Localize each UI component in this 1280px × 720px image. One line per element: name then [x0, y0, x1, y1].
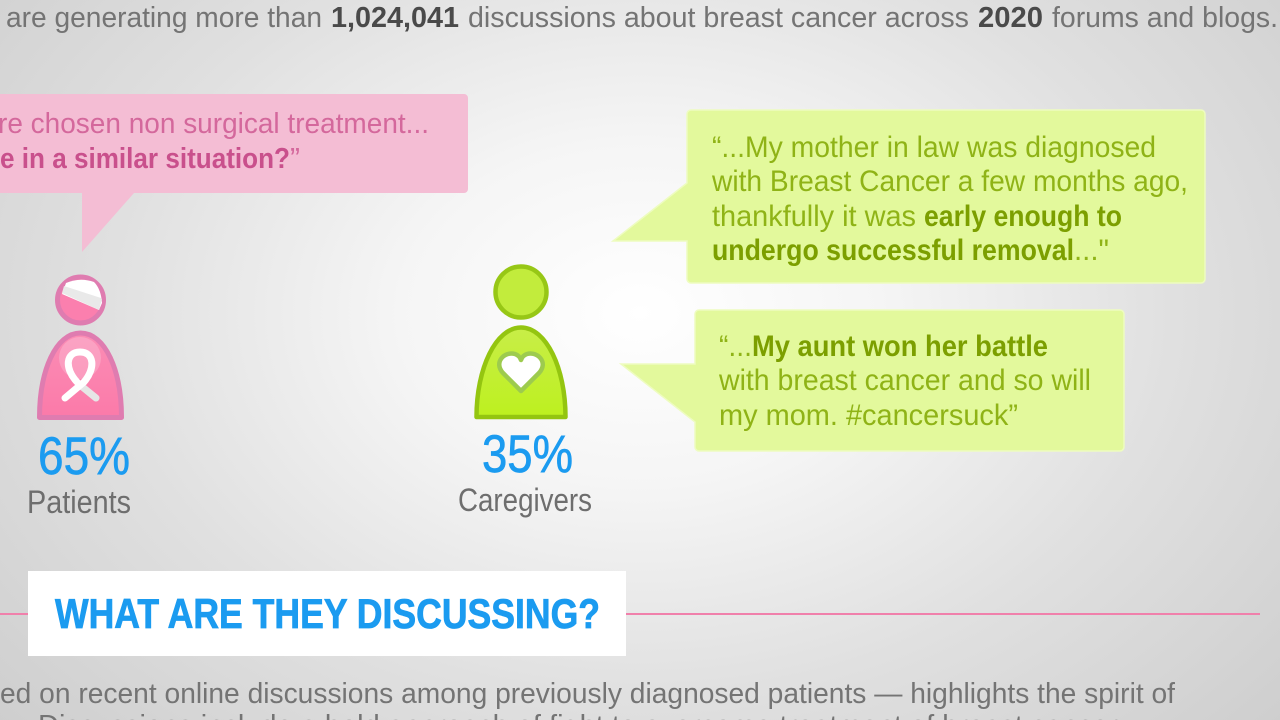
callout: caregiver quote 1: undergo successful removal — [712, 234, 1074, 267]
callout: patient quote: re chosen non surgical treatment... — [0, 108, 429, 140]
text block: discussion summary: ed on recent online discussions among previously diagnosed patients — highlights the spirit of — [0, 678, 1176, 710]
callout: caregiver quote 1 — [613, 110, 1205, 283]
headline: discussion totals: are generating more than — [6, 2, 322, 34]
stat: 35% caregivers: Caregivers — [458, 482, 592, 518]
callout: caregiver quote 2: with breast cancer and so will — [718, 364, 1091, 397]
callout: caregiver quote 1: with Breast Cancer a few months ago, — [711, 165, 1188, 198]
headline: discussion totals — [6, 2, 1278, 34]
callout: caregiver quote 2: my mom. #cancersuck” — [719, 399, 1018, 432]
callout: patient quote — [0, 94, 468, 252]
stat: 65% patients: Patients — [27, 484, 131, 520]
callout: caregiver quote 2: “... — [719, 330, 752, 363]
stat: 65% patients — [27, 427, 131, 520]
callout: caregiver quote 2: My aunt won her battle — [752, 330, 1048, 363]
callout: caregiver quote 1: ..." — [1074, 234, 1109, 267]
callout: patient quote: e in a similar situation? — [0, 143, 290, 175]
callout: caregiver quote 1: early enough to — [924, 200, 1122, 233]
icon: caregiver figure with heart — [476, 266, 566, 417]
callout: caregiver quote 1: “...My mother in law was diagnosed — [712, 131, 1156, 164]
headline: discussion totals: forums and blogs. — [1052, 2, 1278, 34]
stat: 35% caregivers: 35% — [482, 425, 573, 484]
icon: patient figure with ribbon — [40, 277, 122, 418]
callout: caregiver quote 2 — [621, 310, 1124, 451]
headline: discussion totals: discussions about breast cancer across — [468, 2, 969, 34]
heading: what are they discussing: WHAT ARE THEY DISCUSSING? — [55, 590, 600, 637]
headline: discussion totals: 2020 — [978, 2, 1043, 34]
heading: what are they discussing — [28, 571, 626, 656]
callout: caregiver quote 1: thankfully it was — [712, 200, 916, 233]
headline: discussion totals: 1,024,041 — [331, 2, 459, 34]
stat: 65% patients: 65% — [38, 427, 130, 486]
callout: patient quote: ” — [290, 143, 300, 175]
stat: 35% caregivers — [458, 425, 592, 518]
